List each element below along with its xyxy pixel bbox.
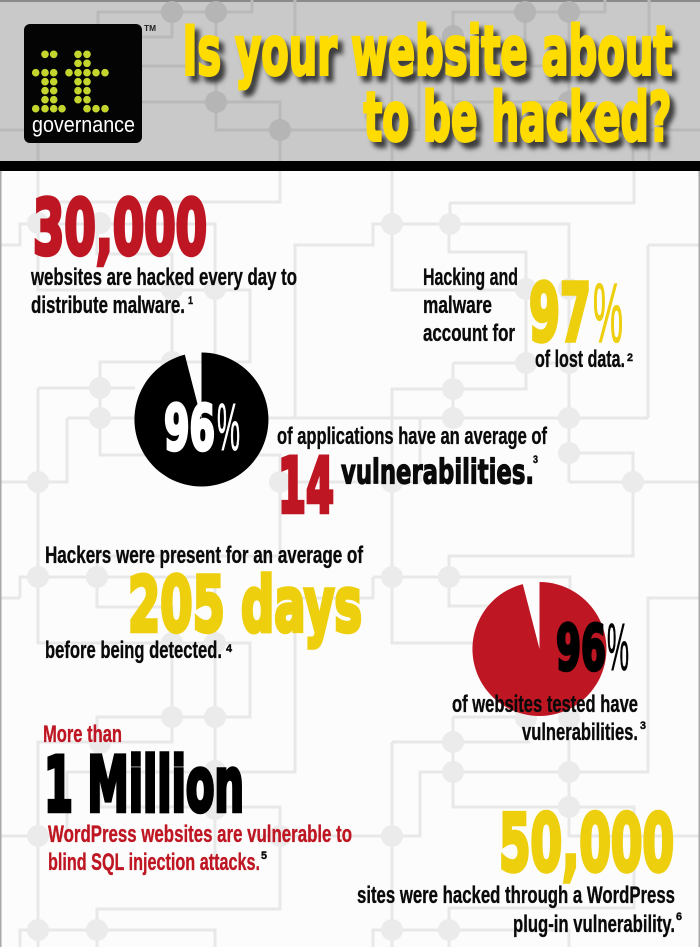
stat: 14 vulnerabilities: 3: [533, 454, 538, 466]
stat: 97% lost data: account for: [423, 320, 515, 347]
stat: 97% lost data: [423, 264, 633, 373]
caption: websites tested: vulnerabilities.: [522, 719, 638, 746]
stat: 205 days: 4: [226, 643, 233, 655]
infographic canvas: %: [607, 610, 629, 685]
stat: 50,000 sites: [357, 800, 682, 938]
stat: 14 vulnerabilities: 14: [278, 441, 334, 530]
pie chart: 96% of applications: 96: [164, 392, 215, 464]
stat: 30,000 websites: [30, 183, 297, 319]
stat: 14 vulnerabilities: of applications have an average of: [277, 423, 548, 450]
stat: 97% lost data: Hacking and: [423, 264, 518, 291]
stat: 205 days: Hackers were present for an average of: [45, 542, 364, 569]
title: [182, 12, 672, 158]
stat: 1 Million: More than: [43, 721, 122, 748]
stat: 1 Million: WordPress websites are vulnerable to: [48, 821, 352, 848]
logo: IT Governance: [24, 23, 156, 143]
stat: 14 vulnerabilities: vulnerabilities.: [341, 452, 534, 492]
stat: 97% lost data: malware: [423, 292, 492, 319]
stat: 30,000 websites: websites are hacked every day to: [30, 264, 297, 291]
stat: 97% lost data: 97: [529, 268, 591, 360]
pie chart: 96% of websites: [472, 582, 629, 716]
stat: 97% lost data: %: [593, 266, 623, 360]
stat: 205 days: [45, 542, 364, 664]
stat: 205 days: before being detected.: [45, 637, 222, 664]
stat: 205 days: 205 days: [128, 560, 362, 649]
pie chart: 96% of applications: [134, 352, 268, 486]
stat: 30,000 websites: distribute malware.: [31, 292, 185, 319]
stat: 14 vulnerabilities: [277, 423, 548, 530]
pie chart: 96% of applications: %: [217, 390, 240, 465]
stat: 1 Million: 1 Million: [44, 740, 244, 829]
stat: 30,000 websites: 30,000: [33, 183, 207, 272]
pie chart: 96% of websites: 96: [556, 612, 606, 684]
header band: [0, 0, 700, 171]
stat: 50,000 sites: 6: [676, 911, 682, 923]
logo: IT Governance: TM: [144, 23, 156, 33]
stat: 1 Million: 5: [261, 850, 267, 862]
logo: IT Governance: governance: [32, 112, 135, 137]
caption: websites tested: 3: [640, 720, 646, 732]
stat: 97% lost data: of lost data.: [535, 346, 625, 373]
stat: 97% lost data: 2: [627, 352, 633, 364]
stat: 30,000 websites: 1: [188, 295, 193, 307]
stat: 1 Million: blind SQL injection attacks.: [48, 849, 260, 876]
stat: 1 Million: [43, 721, 352, 876]
caption: websites tested: [452, 691, 646, 746]
